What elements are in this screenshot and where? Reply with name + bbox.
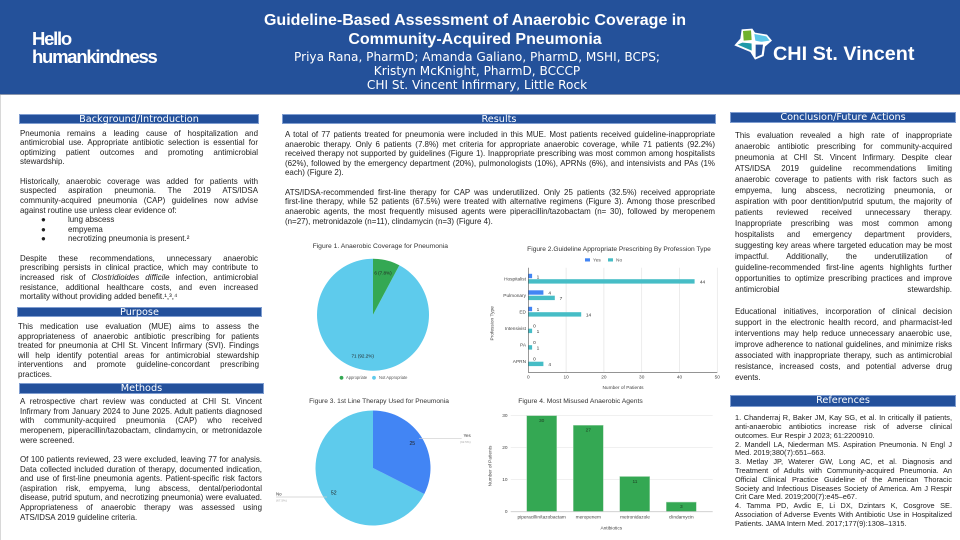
text: conclusion: improve adherence to national guidelines, and minimize risks xyxy=(735,340,952,348)
text: conclusion: anaerobic coverage to patients with risk factors such as xyxy=(735,174,952,184)
logo: Hello humankindness: humankindness xyxy=(32,46,157,67)
text: methods: meropenem, piperacillin/tazobactam, clindamycin, or metronidazole xyxy=(20,426,262,435)
bars xyxy=(527,416,696,512)
y tick labels: 30 xyxy=(502,413,508,419)
category labels: clindamycin xyxy=(669,514,694,520)
heading: Purpose: Purpose xyxy=(120,307,159,318)
text: conclusion: resistance, increased costs, and potential adverse drug xyxy=(735,362,952,370)
slice labels: 25 xyxy=(409,441,415,447)
text: background: lung abscess xyxy=(68,215,114,224)
gridlines xyxy=(511,415,713,479)
category labels xyxy=(503,277,527,365)
chart: Figure 3 pie xyxy=(276,398,471,526)
text: purpose: appropriateness of anaerobic antibiotic prescribing for patients xyxy=(18,332,259,341)
callout: yes: (32.5%) xyxy=(460,440,471,444)
x axis title: Number of Patients xyxy=(602,385,644,391)
legend xyxy=(585,258,622,264)
text: conclusion: empyema, lung abscess, necrotizing pneumonia, or xyxy=(735,186,952,194)
text: background: ● xyxy=(41,234,46,243)
title: Community-Acquired Pneumonia xyxy=(348,31,602,48)
text: references: Association of Adverse Events With Antibiotic Use in Hospitalized xyxy=(735,510,952,519)
text: methods xyxy=(20,397,262,522)
text: references: Society and Infectious Diseases Society of America. Am J Respir xyxy=(735,484,952,493)
legend xyxy=(340,375,408,380)
tick labels xyxy=(527,374,720,380)
heading: Background/Introduction xyxy=(19,114,259,124)
text: conclusion xyxy=(735,130,952,382)
callout: no: No xyxy=(276,491,282,496)
heading: Results xyxy=(282,114,716,124)
text: methods: Data collected included duration of therapy, documented indication, xyxy=(20,465,262,474)
text: methods: (aspiration risk, empyema, lung abscess, dental/periodontal xyxy=(20,484,262,493)
text: background: ● xyxy=(41,225,46,234)
chart: Figure 2 bars xyxy=(490,246,720,391)
tick labels: 20 xyxy=(601,374,607,380)
text: background: ● xyxy=(41,215,46,224)
text: results: received therapy not supported by guidelines (Figure 1). Inappropriate prescribing was most common among hospitalists xyxy=(285,149,715,158)
logo: Hello humankindness xyxy=(32,28,157,67)
value labels xyxy=(533,274,705,368)
y tick labels: 20 xyxy=(502,445,508,451)
category labels: Hospitalist xyxy=(504,277,527,283)
value labels: 1 xyxy=(537,329,540,335)
text: methods: and use of first-line pneumonia agents. Patient-specific risk factors xyxy=(20,474,262,483)
text: results: anaerobic agents, the most frequently misused agents were piperacillin/tazobactam (n= 30), followed by meropenem xyxy=(285,207,715,216)
value labels: 27 xyxy=(586,427,591,433)
logo: Hello humankindness: Hello xyxy=(32,28,71,49)
heading: References: References xyxy=(816,395,870,406)
text: methods: disease, putrid sputum, and necrotizing pneumonia) were evaluated. xyxy=(20,493,262,502)
title: Guideline-Based Assessment of Anaerobic Coverage in xyxy=(264,12,686,29)
legend: Not Appropriate xyxy=(379,375,408,380)
left page edge xyxy=(0,95,1,540)
text: references: 3. Metlay JP, Waterer GW, Long AC, et al. Diagnosis and xyxy=(735,457,952,466)
value labels: 14 xyxy=(586,312,591,318)
slice labels: 71 (92.2%) xyxy=(351,353,374,358)
text: background: necrotizing pneumonia is present.² xyxy=(68,234,189,243)
value labels: 44 xyxy=(700,279,705,285)
chart: Figure 1 pie xyxy=(313,243,448,380)
text: conclusion: associated with inappropriate therapy, such as antimicrobial xyxy=(735,350,952,360)
text: background: Historically, anaerobic coverage was added for patients with xyxy=(20,177,258,186)
text: conclusion: patients reviewed received unnecessary therapy. xyxy=(735,208,952,216)
text: results: (62%), followed by the emergency department (20%), pulmonologists (10%), APRNs (6%), and intensivists and PAs (1% xyxy=(285,159,715,168)
text: results: first-line therapy, while 52 patients (67.5%) were treated with alternative regimens (Figure 3). Among those prescribed xyxy=(285,197,715,206)
callout: yes xyxy=(419,433,471,444)
no bars xyxy=(528,279,695,366)
text: references: Treatment of Adults with Community-acquired Pneumonia. An xyxy=(735,466,952,475)
slice labels xyxy=(351,270,392,358)
y tick labels: 10 xyxy=(502,477,508,483)
text: conclusion: ATS/IDSA 2019 guideline recommendations limiting xyxy=(735,164,952,172)
value labels: 7 xyxy=(560,296,563,302)
value labels: 0 xyxy=(533,340,536,346)
slice: no xyxy=(315,410,424,525)
callout: yes: Yes xyxy=(464,433,471,438)
text: purpose: interventions and promote guideline-concordant prescribing xyxy=(18,360,259,369)
value labels: 30 xyxy=(539,418,545,424)
text: background: empyema xyxy=(68,225,103,234)
gridlines xyxy=(566,268,717,372)
text: references: Crit Care Med. 2019;200(7):e45–e67. xyxy=(735,492,857,501)
text: methods: were screened. xyxy=(20,436,74,445)
tick labels: 10 xyxy=(563,374,569,380)
text: conclusion: opportunities to optimize prescribing practices and improve xyxy=(735,274,952,282)
text: results xyxy=(285,130,715,226)
category labels: metronidazole xyxy=(620,514,650,520)
baseline xyxy=(511,511,713,513)
tick labels: 50 xyxy=(715,374,720,380)
text: purpose: will help identify potential areas for antimicrobial stewardship xyxy=(18,351,259,360)
logo: CHI St. Vincent xyxy=(734,28,914,65)
value labels xyxy=(539,418,683,510)
callout: no xyxy=(276,491,327,502)
legend: Yes xyxy=(593,258,601,264)
text: conclusion: support in the electronic health record, and pharmacist-led xyxy=(735,318,952,326)
text: background: Despite these recommendations, unnecessary anaerobic xyxy=(20,254,258,263)
y axis title: Number of Patients xyxy=(488,445,494,486)
value labels: 1 xyxy=(537,307,540,313)
text: purpose: This medication use evaluation (MUE) aims to assess the xyxy=(18,322,259,331)
header banner xyxy=(0,0,960,95)
text: conclusion: antimicrobial stewardship. xyxy=(735,284,952,294)
text: methods: Infirmary from January 2024 to June 2025. Adult patients diagnosed xyxy=(20,407,262,416)
text: results: anaerobic therapy. Only 6 patients (7.8%) met criteria for appropriate anaerobic coverage, while 71 patients (92.2%) xyxy=(285,140,715,149)
text: background: suspected aspiration pneumonia. The 2019 ATS/IDSA xyxy=(20,186,258,195)
text: background: increased risk of Clostridioides difficile infection, antimicrobial xyxy=(20,273,258,282)
value labels: 3 xyxy=(680,504,683,510)
value labels: 0 xyxy=(533,357,536,363)
category labels: Intensivist xyxy=(505,326,527,332)
heading: References xyxy=(730,395,956,406)
legend: No xyxy=(616,258,622,264)
text: methods: Appropriateness of anaerobic therapy was assessed using xyxy=(20,503,262,512)
category labels: piperacillin/tazobactam xyxy=(518,514,566,520)
text: conclusion: events. xyxy=(735,372,761,382)
x axis title: Antibiotics xyxy=(600,525,623,531)
authors and affiliation: Kristyn McKnight, PharmD, BCCCP xyxy=(374,64,580,78)
y axis title: Profession Type xyxy=(490,306,496,340)
category labels: Pulmonary xyxy=(503,293,527,299)
text: results: ATS/IDSA-recommended first-line therapy for CAP was underutilized. Only 25 patients (32.5%) received appropriate xyxy=(285,188,715,197)
slice: appropriate xyxy=(373,259,399,315)
axes xyxy=(528,268,717,372)
category labels: ED xyxy=(519,310,527,316)
authors and affiliation: Priya Rana, PharmD; Amanda Galiano, PharmD, MSHI, BCPS; xyxy=(294,50,660,64)
slice: not appropriate xyxy=(317,259,429,371)
text: background: Pneumonia remains a leading cause of hospitalization and xyxy=(20,128,258,138)
value labels: 1 xyxy=(537,274,540,280)
text: results: each) (Figure 2). xyxy=(285,168,344,177)
text: references: 2. Mandell LA, Niederman MS. Aspiration Pneumonia. N Engl J xyxy=(735,440,952,449)
text: conclusion: suggesting key areas where targeted education may be most xyxy=(735,240,952,250)
text: conclusion: Inappropriate prescribing was most common among xyxy=(735,218,952,228)
heading: Conclusion/Future Actions xyxy=(730,112,956,123)
legend: Appropriate xyxy=(346,375,368,380)
figure 3 title: Figure 3. 1st Line Therapy Used for Pneumonia xyxy=(309,398,449,405)
text: references: Official Clinical Practice Guideline of the American Thoracic xyxy=(735,475,952,484)
text: conclusion: Educational initiatives, incorporation of clinical decision xyxy=(735,306,952,316)
slice labels: 6 (7.8%) xyxy=(374,270,392,275)
text: purpose xyxy=(18,322,259,379)
heading: Results: Results xyxy=(482,114,516,125)
tick labels: 0 xyxy=(527,374,530,380)
tick labels: 40 xyxy=(677,374,682,380)
text: background: community-acquired pneumonia (CAP) guidelines now advise xyxy=(20,196,258,205)
text: methods: Of 100 patients reviewed, 23 were excluded, leaving 77 for analysis. xyxy=(20,455,262,464)
title xyxy=(264,12,686,48)
slice labels xyxy=(331,441,415,496)
text: conclusion: This evaluation revealed a high rate of inappropriate xyxy=(735,130,952,140)
text: references: 1. Chanderraj R, Baker JM, Kay SG, et al. In critically ill patients, xyxy=(735,413,952,422)
tick labels: 30 xyxy=(639,374,645,380)
category labels: APRN xyxy=(513,359,527,365)
text: results: A total of 77 patients treated for pneumonia were included in this MUE. Most patients received guideline-inappropriate xyxy=(285,130,715,139)
authors and affiliation: CHI St. Vincent Infirmary, Little Rock xyxy=(367,78,587,92)
callout: no: (67.5%) xyxy=(276,498,287,502)
text: methods: ATS/IDSA 2019 guideline criteria. xyxy=(20,513,137,522)
text: methods: with community-acquired pneumonia (CAP) who received xyxy=(20,416,262,425)
text: conclusion: aspiration with poor dentition/putrid sputum, the majority of xyxy=(735,196,952,206)
text: references xyxy=(735,413,952,528)
figure 4 title: Figure 4. Most Misused Anaerobic Agents xyxy=(518,398,643,405)
value labels: 11 xyxy=(633,479,638,485)
text: conclusion: pneumonia at CHI St. Vincent Infirmary. Despite clear xyxy=(735,152,952,162)
text: purpose: practices. xyxy=(18,370,52,379)
text: background: resistance, additional healthcare costs, and even increased xyxy=(20,282,258,292)
text: background xyxy=(20,128,258,301)
figure 2 title: Figure 2.Guideline Appropriate Prescribing By Profession Type xyxy=(527,246,711,253)
heading: Methods: Methods xyxy=(121,383,162,394)
category labels xyxy=(518,514,694,520)
chart: Figure 4 bars xyxy=(488,398,713,531)
value labels: 0 xyxy=(533,323,536,329)
value labels: 1 xyxy=(537,346,540,352)
figure 1 title: Figure 1. Anaerobic Coverage for Pneumonia xyxy=(313,243,448,250)
slice: yes xyxy=(373,410,430,494)
text: background: optimizing patient outcomes and promoting antimicrobial xyxy=(20,148,258,157)
y tick labels xyxy=(502,413,508,515)
text: background: stewardship. xyxy=(20,157,65,166)
text: background: prescribing persists in clinical practice, which may contribute to xyxy=(20,263,258,272)
category labels: meropenem xyxy=(576,514,601,520)
text: references: anti-anaerobic antibiotics increase risk of adverse clinical xyxy=(735,422,952,431)
heading: Purpose xyxy=(17,307,262,317)
text: references: outcomes. Eur Respir J 2023; 61:2200910. xyxy=(735,431,875,440)
logo: CHI St. Vincent: CHI St. Vincent xyxy=(773,43,914,65)
text: background: against routine use unless clear evidence of: xyxy=(20,206,177,214)
yes bars xyxy=(528,274,543,311)
text: references: Med. 2019;380(7):651–663. xyxy=(735,448,826,457)
value labels: 4 xyxy=(548,362,551,368)
text: results: (n=27), metronidazole (n=11), clindamycin (n=3) (Figure 4). xyxy=(285,217,493,226)
heading: Methods xyxy=(19,383,264,394)
text: conclusion: anaerobic antibiotic prescribing for community-acquired xyxy=(735,142,952,150)
text: methods: A retrospective chart review was conducted at CHI St. Vincent xyxy=(20,397,262,406)
text: purpose: treated for pneumonia at CHI St. Vincent Infirmary (SVI). Findings xyxy=(18,341,259,350)
text: conclusion: hospitalists and emergency department providers, xyxy=(735,230,952,238)
heading: Background/Introduction: Background/Introduction xyxy=(79,114,199,125)
value labels: 4 xyxy=(548,291,551,297)
text: conclusion: interventions may help reduce unnecessary anaerobic use, xyxy=(735,328,952,338)
text: background: mortality without providing added benefit.¹,³,⁴ xyxy=(20,292,177,301)
text: conclusion: impactful. Additionally, the underutilization of xyxy=(735,252,952,260)
text: background: antimicrobial use. Appropriate antibiotic selection is essential for xyxy=(20,138,258,147)
text: references: 4. Tamma PD, Avdic E, Li DX, Dzintars K, Cosgrove SE. xyxy=(735,501,952,510)
text: references: Patients. JAMA Intern Med. 2017;177(9):1308–1315. xyxy=(735,519,906,528)
authors and affiliation xyxy=(294,50,660,92)
text: conclusion: guideline-recommended first-line agents highlights further xyxy=(735,262,952,272)
y tick labels: 0 xyxy=(505,509,508,515)
heading: Conclusion/Future Actions: Conclusion/Future Actions xyxy=(780,112,906,123)
category labels: PA xyxy=(520,343,527,349)
slice labels: 52 xyxy=(331,490,337,496)
